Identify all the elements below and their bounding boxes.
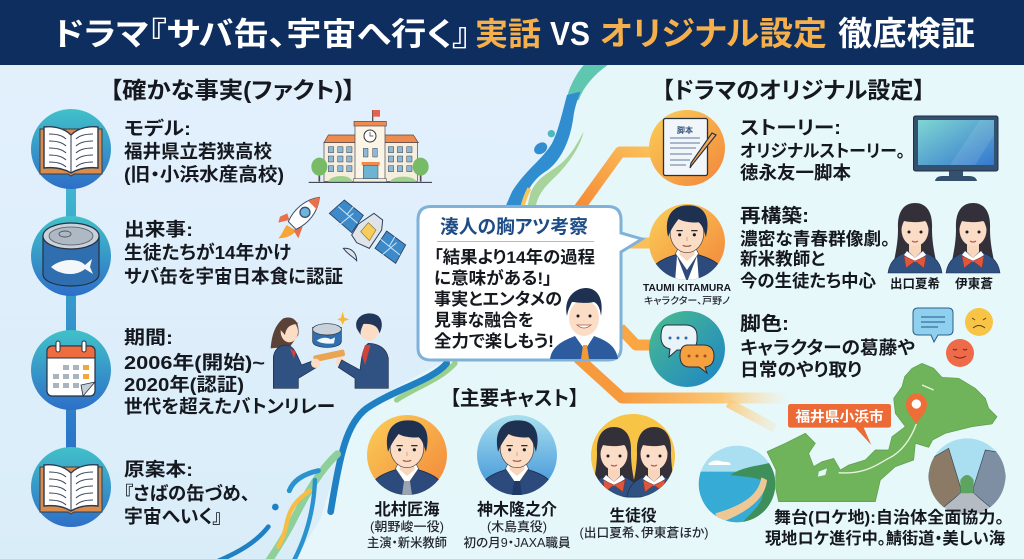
icon: television xyxy=(914,116,998,181)
text: period: 2020年(認証) xyxy=(124,374,244,395)
icon: handover xyxy=(271,312,388,388)
text: embellishment: 脚色: xyxy=(740,313,789,335)
flowing wave ribbon xyxy=(217,65,608,559)
heading: facts: 【確かな事実(ファクト)】 xyxy=(110,77,355,103)
icon: rocket xyxy=(278,197,319,238)
map pin xyxy=(906,393,927,424)
caption: Kitamura: 主演・新米教師 xyxy=(367,535,447,550)
captions: student names: 伊東蒼 xyxy=(955,276,993,291)
icon: chat bubbles xyxy=(649,311,725,387)
text: model: (旧・小浜水産高校) xyxy=(124,164,284,185)
panel: facts timeline xyxy=(31,109,343,527)
icon: can xyxy=(31,216,111,296)
panel: main cast xyxy=(367,414,708,550)
text: reconstruction: 濃密な青春群像劇。 xyxy=(740,229,890,249)
callout text: 見事な融合を xyxy=(434,311,534,330)
icon: calendar xyxy=(31,330,111,410)
portrait: Kamiki xyxy=(477,415,557,498)
header bar xyxy=(0,0,1024,65)
text: period: 世代を超えたバトンリレー xyxy=(124,396,335,417)
text: story xyxy=(740,118,905,183)
heading: original settings: 【ドラマのオリジナル設定】 xyxy=(662,77,925,103)
icon: school xyxy=(309,110,432,182)
callout text: に意味がある!」 xyxy=(434,268,552,288)
icon: open book 2 xyxy=(31,447,111,527)
text: event: 生徒たちが14年かけ xyxy=(124,242,291,263)
caption: character name xyxy=(643,282,731,307)
title: オリジナル設定 xyxy=(600,15,827,52)
map: Fukui location xyxy=(695,363,1005,525)
text: model: モデル: xyxy=(124,118,191,139)
icon: teacher portrait xyxy=(647,204,727,283)
callout text: 事実とエンタメの xyxy=(434,290,562,309)
caption: Kitamura: 北村匠海 xyxy=(374,500,440,519)
callout: commentary xyxy=(418,206,642,360)
title: VS xyxy=(550,15,590,52)
text: embellishment: キャラクターの葛藤や xyxy=(740,338,915,358)
icon: satellite xyxy=(329,200,406,263)
map land xyxy=(767,363,997,502)
caption: filming location: 舞台(ロケ地):自治体全面協力。 xyxy=(774,507,1004,527)
text: reconstruction: 今の生徒たち中心 xyxy=(740,271,876,291)
captions: student names: 出口夏希 xyxy=(890,276,940,291)
text: reconstruction xyxy=(740,204,890,291)
text: event: 出来事: xyxy=(124,219,193,240)
caption: students: (出口夏希、伊東蒼ほか) xyxy=(580,525,708,540)
portrait: commentator xyxy=(550,288,618,359)
text: embellishment xyxy=(740,313,915,380)
title xyxy=(53,15,975,52)
text: model xyxy=(124,118,284,185)
callout text: 「結果より14年の過程 xyxy=(434,247,595,267)
caption: Kamiki: (木島真役) xyxy=(487,519,547,534)
orange connector lines xyxy=(578,152,790,428)
callout text: 全力で楽しもう! xyxy=(434,332,554,351)
caption: character name: キャラクター、戸野ノ xyxy=(644,295,730,307)
text: embellishment: 日常のやり取り xyxy=(740,360,862,380)
text: source book xyxy=(124,459,250,527)
text: story: 徳永友一脚本 xyxy=(740,163,851,183)
text: reconstruction: 再構築: xyxy=(740,204,809,227)
caption: filming location: 現地ロケ進行中。鯖街道・美しい海 xyxy=(765,529,1005,548)
callout text xyxy=(434,247,595,351)
panel: original settings xyxy=(643,110,1000,387)
icon: emotion bubbles xyxy=(913,308,993,367)
icon: open book xyxy=(31,109,111,189)
text: story: オリジナルストーリー。 xyxy=(740,141,905,161)
caption: students: 生徒役 xyxy=(610,506,656,525)
text: period xyxy=(124,327,335,417)
text: source book: 『さばの缶づめ、 xyxy=(124,483,250,504)
title: 実話 xyxy=(475,16,541,52)
text: event xyxy=(124,219,343,287)
text: source book: 宇宙へいく』 xyxy=(124,506,222,527)
text: event: サバ缶を宇宙日本食に認証 xyxy=(124,266,343,287)
caption: students xyxy=(580,506,708,540)
portrait: students xyxy=(591,414,675,498)
title: ドラマ『サバ缶、宇宙へ行く』 xyxy=(53,16,470,52)
icon: script document: 脚本 xyxy=(677,125,693,135)
text: story: ストーリー: xyxy=(740,118,841,139)
town photo xyxy=(929,438,1005,520)
timeline connector xyxy=(66,185,76,451)
caption: filming location xyxy=(765,507,1005,548)
portraits: students xyxy=(888,203,1000,273)
map location tag: 福井県小浜市 xyxy=(795,408,884,424)
portrait: Kitamura xyxy=(367,415,447,498)
caption: Kamiki: 神木隆之介 xyxy=(477,500,557,519)
text: period: 2006年(開始)~ xyxy=(124,352,265,373)
caption: Kitamura xyxy=(367,500,447,550)
text: source book: 原案本: xyxy=(124,459,193,480)
captions: student names xyxy=(890,276,993,291)
map location tag xyxy=(788,404,891,445)
title: 徹底検証 xyxy=(838,15,975,52)
caption: Kamiki xyxy=(464,500,571,550)
caption: Kitamura: (朝野峻一役) xyxy=(370,519,444,534)
text: period: 期間: xyxy=(124,327,173,348)
caption: character name: TAUMI KITAMURA xyxy=(643,282,731,294)
callout title: 湊人の胸アツ考察 xyxy=(440,216,588,238)
icon: script document xyxy=(649,110,725,186)
coast photo xyxy=(698,446,776,522)
text: reconstruction: 新米教師と xyxy=(740,249,825,269)
text: model: 福井県立若狭高校 xyxy=(124,141,272,162)
heading: main cast: 【主要キャスト】 xyxy=(450,387,579,410)
caption: Kamiki: 初の月9・JAXA職員 xyxy=(464,535,571,550)
